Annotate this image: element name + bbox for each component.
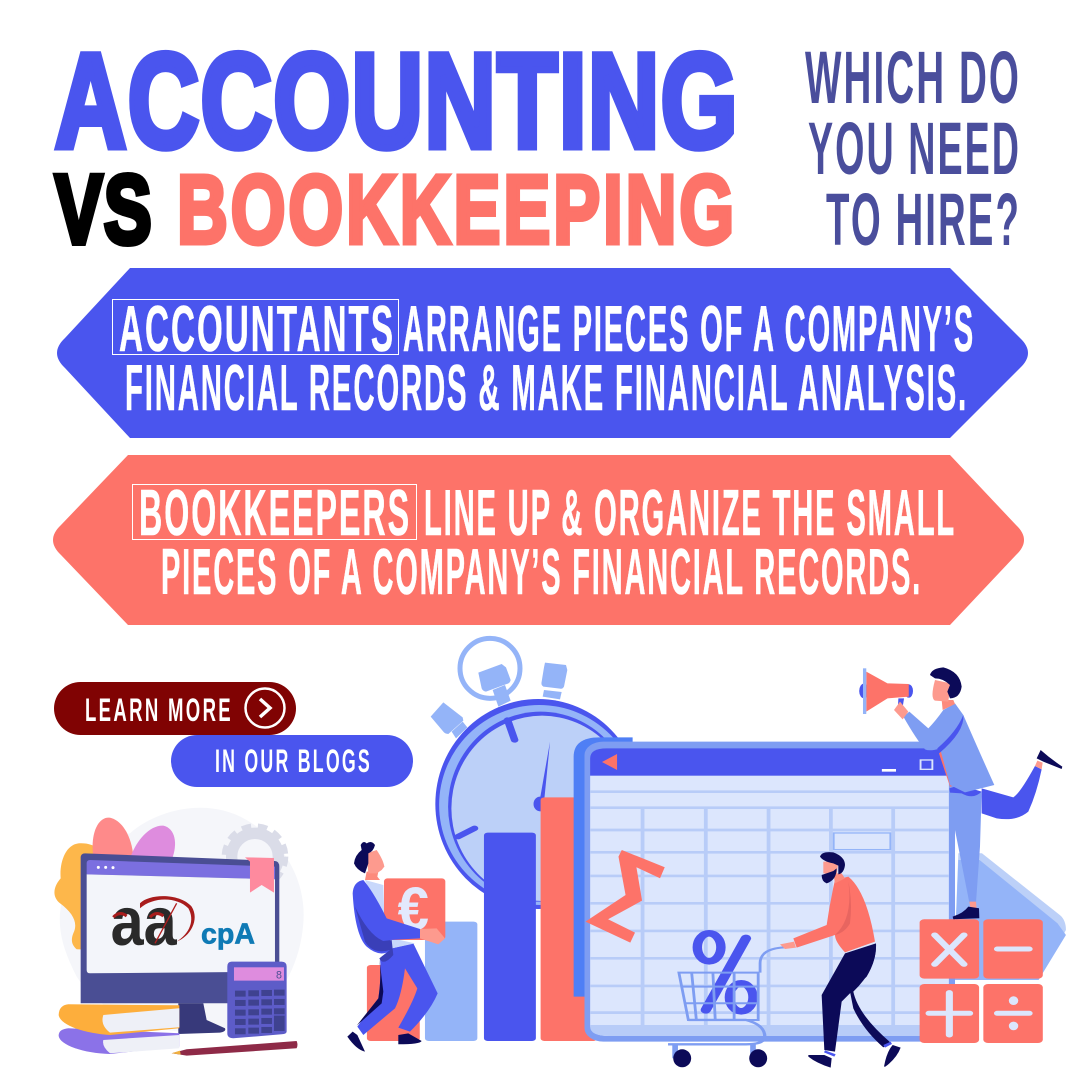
panel: accountants banner: ACCOUNTANTS (119, 292, 395, 365)
button: in our blogs: IN OUR BLOGS (215, 743, 372, 779)
subheading: which do you need to hire (805, 36, 1021, 261)
icon: gear (225, 827, 285, 887)
heading word: BOOKKEEPING: BOOKKEEPING (177, 155, 737, 264)
icon: calculator: 8 (276, 969, 282, 981)
panel: bookkeepers banner (53, 455, 1024, 625)
icon: calculator (227, 962, 287, 1038)
panel: spreadsheet window (574, 737, 955, 1042)
icon: pencil (172, 1041, 297, 1056)
button: learn more (54, 682, 296, 735)
icon: bookmark ribbon (245, 857, 274, 893)
button: learn more: LEARN MORE (85, 692, 233, 728)
background blob (60, 808, 304, 1032)
icon: books (59, 1004, 179, 1054)
icon: stopwatch knobs (431, 638, 567, 738)
icon: zigzag arrow (585, 850, 665, 943)
icon: percent and shopping cart (668, 933, 786, 1067)
heading word: ACCOUNTING: ACCOUNTING (55, 27, 739, 176)
monitor (81, 853, 279, 1034)
logo: aa cpa: aa (111, 884, 178, 960)
panel: accountants banner (57, 268, 1028, 438)
title: Accounting vs Bookkeeping (55, 27, 739, 264)
illustration: accounting scene (367, 668, 1066, 1067)
icon: folder (954, 853, 1066, 980)
button: in our blogs (171, 735, 413, 787)
logo: aa cpa: cpA (201, 918, 255, 950)
icon: stopwatch (435, 699, 641, 909)
chart: bar chart (367, 797, 597, 1041)
person: carrying euro tile: € (398, 875, 429, 942)
logo: aa cpa (111, 884, 255, 960)
icon: math operator tiles (920, 919, 1043, 1043)
panel: bookkeepers banner: BOOKKEEPERS (139, 476, 411, 549)
person: pushing cart (780, 852, 901, 1068)
heading word: VS: VS (55, 155, 153, 264)
icon: leaves (54, 818, 175, 950)
illustration: monitor with logo, books and calculator (54, 808, 304, 1056)
person: shouting through megaphone (894, 667, 1062, 919)
icon: megaphone (859, 668, 913, 714)
person: carrying euro tile (347, 842, 445, 1052)
